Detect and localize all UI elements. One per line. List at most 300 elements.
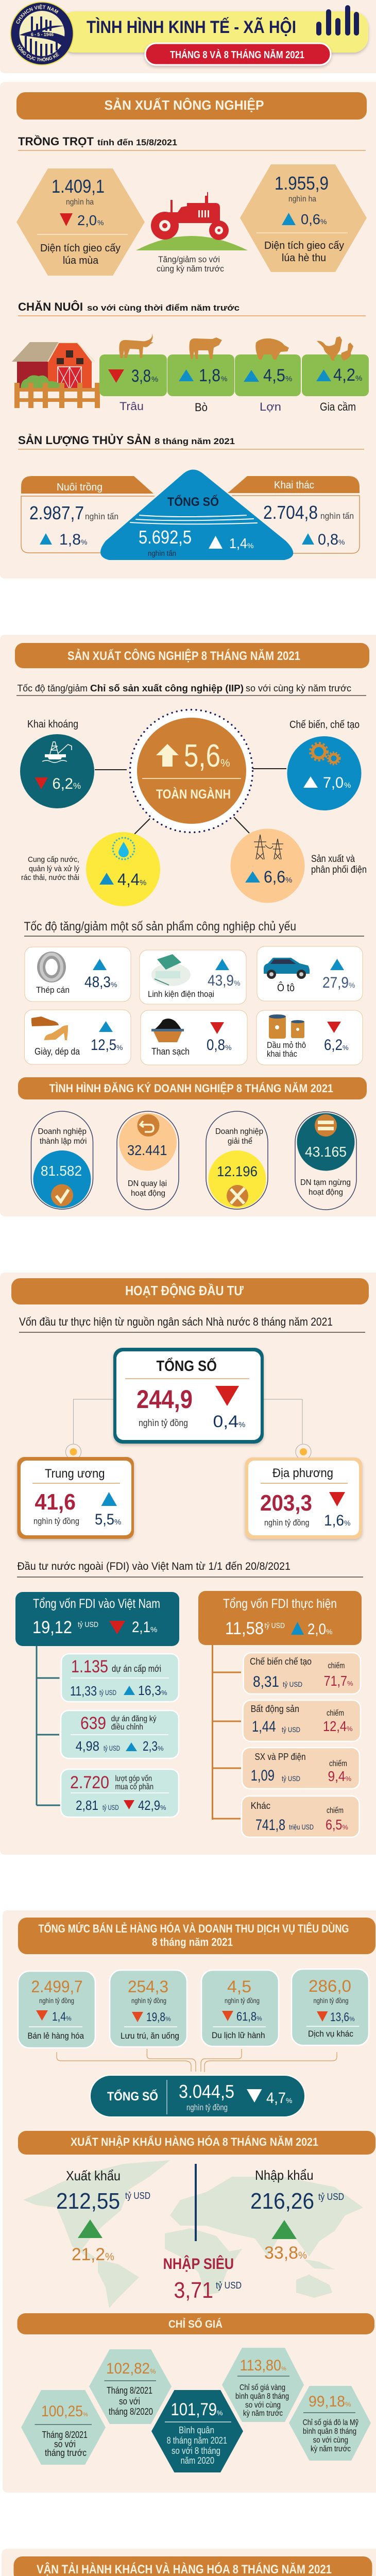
card: adjusted projects: 639 [80,1714,106,1733]
stat: cattle [179,366,227,414]
capsule: new enterprises: Doanh nghiệp [38,1127,87,1136]
card: other FDI: 6,5 [326,1817,342,1833]
box: total FDI: 2,1 [132,1619,150,1636]
panel: agriculture [0,82,376,579]
icon: power pylons [254,835,283,859]
card: retail goods: 1,4 [52,2010,66,2024]
card: crude oil: Dầu mỏ thô [267,1040,306,1050]
card: real estate FDI [243,1700,361,1741]
icon: bar chart [316,5,359,36]
hexagon: autumn rice: Diện tích gieo cấy [40,243,121,254]
box: central: 5,5 [95,1511,114,1528]
stat: poultry: % [355,374,362,383]
green stat boxes [99,354,369,396]
hexagon: US dollar price: 99,18 [309,2393,345,2410]
import [250,2167,344,2263]
hexagon: gold price: kỳ năm trước [243,2409,283,2418]
hexagon: US dollar price: kỳ năm trước [311,2445,351,2453]
icon: gears [310,743,340,765]
card: tourism: % [257,2015,262,2022]
capsule: new enterprises: thành lập mới [40,1137,87,1146]
card: other FDI [242,1796,360,1837]
stat: cattle: Bò [195,401,208,414]
panel: investment [0,1273,376,1855]
hexagon: summer-autumn rice [240,164,367,272]
total fishery triangle: 5.692,5 [139,527,192,548]
heading: livestock [18,300,366,316]
section heading: trade: XUẤT NHẬP KHẨU HÀNG HÓA 8 THÁNG NĂM 2021 [71,2136,318,2148]
card: capital contributions: 2.720 [70,1773,109,1792]
text: compare note: cùng kỳ năm trước [157,264,224,274]
card: crude oil [257,1010,363,1065]
circle: water supply [21,832,160,906]
box: total FDI: % [150,1625,157,1634]
card: real estate FDI: chiếm [327,1709,344,1718]
card: adjusted projects: % [158,1744,164,1752]
card: crude oil: % [343,1044,349,1052]
box: total FDI: Tổng vốn FDI vào Việt Nam [33,1597,160,1611]
hexagon: vs August 2020: Tháng 8/2021 [107,2385,152,2396]
stat: pigs [244,366,292,413]
stat: cattle: 1,8 [199,366,220,385]
card: other FDI: triệu USD [289,1823,314,1831]
card: retail goods: % [66,2015,72,2022]
card: real estate FDI: tỷ USD [282,1725,300,1734]
import: Nhập khẩu [255,2167,313,2183]
stat: buffalo: 3,8 [131,366,151,386]
heading: livestock: CHĂN NUÔI [18,300,83,313]
subtitle pill: THÁNG 8 VÀ 8 THÁNG NĂM 2021 [170,49,304,61]
export: tỷ USD [125,2191,150,2201]
total retail pill [90,2075,305,2117]
card: cars [257,946,363,1001]
hexagon: gold price: bình quân 8 tháng [235,2392,289,2401]
hexagon: eight-month average CPI: Bình quân [179,2425,214,2435]
capture box: nghìn tấn [320,511,354,521]
section heading: SẢN XUẤT CÔNG NGHIỆP 8 THÁNG NĂM 2021 [67,648,300,663]
total fishery triangle: nghìn tấn [148,549,176,558]
card: phone components [140,950,246,1004]
stat: poultry: Gia cầm [320,400,356,413]
hexagon: autumn rice: % [97,218,104,227]
total fishery triangle [100,470,293,560]
section heading: retail [18,1918,375,1954]
box: central: 41,6 [35,1489,76,1515]
heading: FDI: Đầu tư nước ngoài (FDI) vào Việt Nam từ 1/1 đến 20/8/2021 [18,1561,290,1572]
stat: poultry [316,365,362,413]
capsule: returned enterprises: 32.441 [127,1142,167,1158]
hexagon: US dollar price: bình quân 8 tháng [303,2427,356,2436]
card: new projects: 16,3 [138,1683,161,1698]
card: cars: % [349,981,355,989]
section heading: SẢN XUẤT NÔNG NGHIỆP [104,97,264,113]
card: capital contributions: lượt góp vốn [115,1774,152,1783]
import: 33,8 [264,2243,298,2263]
capture box: Khai thác [274,480,314,491]
box: central: Trung ương [45,1467,105,1481]
card: phone components: % [234,979,240,987]
total retail pill: nghìn tỷ đồng [186,2103,228,2112]
card: capital contributions: tỷ USD [102,1803,118,1811]
hexagon: US dollar price: so với cùng [313,2436,348,2445]
central circle: whole industry [130,710,252,833]
hexagon: summer-autumn rice: 0,6 [301,211,320,227]
box: local [245,1458,362,1539]
card: coal [141,1010,247,1065]
section heading: HOẠT ĐỘNG ĐẦU TƯ [125,1283,244,1298]
section heading: price index: CHỈ SỐ GIÁ [168,2318,223,2330]
section heading [11,1278,369,1304]
central circle: whole industry: 5,6 [184,738,220,774]
icon: buffalo [119,333,153,358]
circle: manufacturing: 7,0 [323,774,344,791]
panel: trade and prices [3,1910,376,2493]
title: TÌNH HÌNH KINH TẾ - XÃ HỘI [87,17,296,37]
hexagon: vs August 2020: so với [119,2396,140,2406]
circle: electricity [231,828,367,903]
card: electricity FDI: chiếm [329,1759,347,1768]
hexagon: summer-autumn rice: lúa hè thu [282,252,326,264]
box: local: nghìn tỷ đồng [264,1518,310,1528]
card: retail goods: Bán lẻ hàng hóa [28,2031,84,2041]
aquaculture box: % [81,538,87,546]
circle: electricity: Sản xuất và [311,854,355,865]
box: disbursed FDI: Tổng vốn FDI thực hiện [223,1597,337,1611]
capsule: dissolved enterprises [206,1111,268,1209]
circle: manufacturing: Chế biến, chế tạo [289,719,360,731]
card: manufacturing FDI: tỷ USD [283,1680,302,1688]
card: tourism: 4,5 [227,1977,251,1996]
box: total FDI: tỷ USD [78,1620,98,1629]
capsule: returned enterprises: DN quay lại [128,1179,167,1188]
hexagon: US dollar price [289,2386,371,2461]
box: total FDI [15,1592,179,1646]
box: total investment [113,1348,264,1444]
box: local: 1,6 [324,1512,344,1529]
box: total investment: 244,9 [136,1385,193,1414]
card: rolled steel [25,947,131,1002]
logo: General Statistics Office: TỔNG CỤC THỐNG KÊ [17,44,59,61]
circle: manufacturing: % [344,781,351,790]
total retail pill: 3.044,5 [179,2081,234,2102]
panel: transport and visitors [2,2549,376,2576]
circle: electricity: 6,6 [264,868,285,886]
card: capital contributions: mua cổ phần [115,1782,153,1791]
heading: IIP [16,683,366,696]
card: phone components: 43,9 [208,972,234,989]
card: new projects: dự án cấp mới [112,1664,161,1674]
card: tourism: 61,8 [236,2010,257,2024]
card: capital contributions: 42,9 [138,1798,160,1813]
total fishery triangle: TỔNG SỐ [167,495,219,509]
total retail pill: % [286,2096,292,2105]
card: accommodation: 254,3 [128,1977,168,1996]
hexagon: gold price: 113,80 [240,2357,281,2374]
card: electricity FDI: % [345,1775,351,1783]
import: % [298,2250,307,2261]
hexagon: autumn rice: 1.409,1 [52,176,105,197]
capsule: suspended enterprises [295,1112,356,1210]
box: disbursed FDI [198,1591,362,1645]
icon: poultry [317,336,353,361]
section heading [15,643,369,668]
card: coal: % [225,1043,231,1052]
card: crude oil: 6,2 [324,1037,343,1054]
heading: crops [18,135,366,150]
hexagon: autumn rice: nghìn ha [66,198,94,207]
hexagon: eight-month average CPI: 8 tháng năm 2021 [167,2435,227,2446]
card: real estate FDI: 1,44 [252,1718,276,1735]
circle: electricity: phân phối điện [311,865,367,875]
hexagon: vs August 2020: 102,82 [106,2360,150,2377]
circle: mining: Khai khoáng [27,719,78,730]
hexagon: vs previous month: Tháng 8/2021 [42,2430,88,2440]
export: 21,2 [72,2245,105,2264]
hexagon: summer-autumn rice: % [320,217,327,226]
world map background [23,2160,363,2308]
hexagon: vs August 2020: % [150,2367,156,2375]
circle: mining: 6,2 [53,775,73,792]
card: other services: 286,0 [309,1977,351,1995]
total retail pill: TỔNG SỐ [107,2089,158,2104]
card: other services: Dịch vụ khác [308,2029,353,2039]
box: central: nghìn tỷ đồng [33,1516,79,1526]
card: tourism [201,1970,279,2046]
capture box: 2.704,8 [263,502,318,523]
card: retail goods [18,1971,95,2048]
panel: header [0,0,376,73]
capsule: new enterprises [31,1111,93,1209]
icon: pig [255,338,289,360]
trade deficit: NHẬP SIÊU [163,2255,234,2273]
card: adjusted projects: điều chỉnh [111,1723,143,1732]
hexagon: gold price [222,2348,304,2422]
yellow title band [60,11,368,53]
text: compare note [157,255,224,274]
card: other FDI: Khác [251,1801,270,1811]
circle: water supply: quản lý và xử lý [29,865,79,873]
trade deficit: tỷ USD [216,2280,242,2291]
card: manufacturing FDI: % [347,1680,353,1687]
card: cars: 27,9 [322,974,349,991]
hexagon: eight-month average CPI [151,2390,243,2472]
card: adjusted projects [61,1710,179,1758]
card: rolled steel: % [111,980,117,989]
icon: tractor [136,192,248,250]
hexagon: vs previous month: so với [54,2439,76,2449]
hexagon: summer-autumn rice: 1.955,9 [275,173,329,194]
circle: water supply: % [140,878,146,887]
box: total FDI: 19,12 [32,1618,72,1637]
card: new projects: 11,33 [70,1683,97,1699]
node dots [66,1444,311,1460]
section heading: enterprises [18,1077,367,1099]
card: capital contributions: 2,81 [76,1798,98,1813]
stat: buffalo [108,366,158,413]
heading: IIP: so với cùng kỳ năm trước [246,683,351,693]
hexagon: US dollar price: % [345,2400,351,2408]
hexagon: eight-month average CPI: 101,79 [171,2400,217,2419]
card: new projects: tỷ USD [99,1688,116,1697]
capsule: dissolved enterprises: giải thể [228,1137,252,1146]
hexagon: vs August 2020: tháng 8/2020 [109,2406,153,2417]
card: coal: Than sạch [151,1046,190,1057]
heading: crops: TRỒNG TRỌT [18,135,94,148]
capture box: 0,8 [318,531,338,548]
card: footwear: Giày, dép da [35,1046,80,1057]
card: other FDI: % [342,1823,348,1831]
export: Xuất khẩu [66,2168,121,2183]
card: accommodation [110,1970,187,2047]
trade deficit [163,2255,242,2303]
heading: livestock: so với cùng thời điểm năm trước [87,303,240,313]
hexagon: vs previous month [21,2390,106,2465]
card: new projects: 1.135 [71,1657,108,1676]
capsule: suspended enterprises: DN tạm ngừng [300,1178,351,1187]
import: 216,26 [250,2189,314,2214]
card: footwear: % [116,1043,123,1052]
icon: barn [12,342,100,408]
heading: IIP: Tốc độ tăng/giảm [18,683,88,693]
total fishery triangle: % [247,541,253,550]
heading: IIP: Chỉ số sản xuất công nghiệp (IIP) [90,683,244,693]
connector arrows [57,2049,337,2072]
card: other FDI: 741,8 [255,1817,285,1834]
capsule: dissolved enterprises: 12.196 [217,1163,258,1179]
circle: electricity: % [285,876,292,885]
hexagon: eight-month average CPI: % [217,2409,223,2417]
card: manufacturing FDI: 8,31 [253,1673,279,1690]
box: disbursed FDI: 11,58 [225,1619,264,1638]
logo: General Statistics Office: 6 - 5 - 1946 [31,32,54,37]
stat: buffalo: % [151,375,158,384]
box: disbursed FDI: 2,0 [307,1621,326,1638]
card: capital contributions: % [160,1804,166,1811]
total retail pill: 4,7 [266,2090,286,2107]
card: rolled steel: 48,3 [84,974,111,991]
capsule: new enterprises: 81.582 [41,1163,82,1179]
section heading: retail: 8 tháng năm 2021 [152,1936,233,1948]
box: total investment: 0,4 [213,1412,238,1431]
card: accommodation: nghìn tỷ đồng [131,1996,166,2005]
circle: water supply: Cung cấp nước, [28,855,79,864]
hexagon: autumn rice: 2,0 [77,212,97,228]
hexagon: gold price: Chỉ số giá vàng [240,2383,285,2392]
export: 212,55 [56,2189,120,2214]
hexagon: eight-month average CPI: so với 8 tháng [172,2446,220,2456]
capsule: suspended enterprises: 43.165 [305,1144,347,1160]
box: total investment: nghìn tỷ đồng [139,1418,188,1428]
card: other FDI: chiếm [327,1806,344,1815]
card: footwear: 12,5 [91,1037,116,1054]
card: adjusted projects: 4,98 [76,1738,99,1754]
card: real estate FDI: 12,4 [323,1718,347,1734]
aquaculture box: nghìn tấn [85,512,118,521]
hexagon: summer-autumn rice: nghìn ha [288,195,316,204]
card: retail goods: 2.499,7 [31,1977,83,1996]
box: disbursed FDI: % [326,1628,332,1636]
hexagon: vs previous month: tháng trước [45,2448,87,2458]
card: electricity FDI: tỷ USD [282,1774,300,1783]
card: accommodation: 19,8 [146,2010,165,2024]
heading: fishery [18,434,364,449]
icon: oil rig [42,742,72,762]
hexagon: autumn rice: lúa mùa [63,255,99,266]
hexagon: vs previous month: 100,25 [41,2403,83,2420]
circle: manufacturing [287,719,362,810]
card: coal: 0,8 [207,1037,225,1054]
total fishery triangle: 1,4 [229,535,247,551]
heading: crops: tính đến 15/8/2021 [97,138,177,147]
box: central: % [114,1518,121,1527]
hexagon: vs previous month: % [83,2412,88,2418]
stat: poultry: 4,2 [333,365,355,385]
hexagon: gold price: so với cùng [245,2401,281,2410]
hexagon: US dollar price: Chỉ số giá đô la Mỹ [303,2418,358,2427]
card: adjusted projects: tỷ USD [104,1744,120,1752]
card: phone components: Linh kiện điện thoại [148,989,214,999]
card: tourism: nghìn tỷ đồng [225,1996,260,2005]
card: manufacturing FDI: Chế biến chế tạo [250,1656,312,1667]
card: footwear [25,1010,131,1064]
stat: pigs: Lợn [260,400,281,413]
stat: buffalo: Trâu [119,400,144,413]
box: total investment: TỔNG SỐ [157,1357,217,1375]
card: capital contributions [61,1769,179,1817]
stat: pigs: % [285,375,292,383]
hexagon: autumn rice [16,168,145,276]
subtitle pill [145,43,331,65]
export [56,2168,150,2264]
capsule: returned enterprises [117,1111,179,1210]
box: central [18,1457,134,1539]
box: total investment: % [238,1420,245,1429]
icon: cow [189,337,222,359]
central circle: whole industry: % [220,757,230,769]
card: rolled steel: Thép cán [36,985,70,995]
card: electricity FDI: 1,09 [251,1767,275,1784]
heading: fishery: 8 tháng năm 2021 [155,436,235,446]
card: new projects [61,1654,179,1702]
heading: state capital: Vốn đầu tư thực hiện từ nguồn ngân sách Nhà nước 8 tháng năm 2021 [19,1315,333,1328]
card: manufacturing FDI: 71,7 [324,1673,347,1689]
card: electricity FDI: 9,4 [328,1768,345,1784]
card: manufacturing FDI [244,1653,361,1694]
hexagon: summer-autumn rice: Diện tích gieo cấy [264,240,344,251]
hexagon: vs August 2020 [89,2349,172,2424]
box: local: % [344,1519,350,1527]
section heading: transport [13,2556,372,2576]
card: adjusted projects: dự án đăng ký [111,1715,157,1723]
stat: pigs: 4,5 [263,366,285,385]
card: new projects: % [161,1689,167,1697]
aquaculture box: Nuôi trồng [57,482,102,493]
capture box: % [338,538,345,546]
section heading: trade [18,2131,375,2155]
card: other services: 13,6 [330,2010,349,2024]
import: tỷ USD [318,2192,344,2202]
card: real estate FDI: Bất động sản [251,1704,299,1714]
circle: mining [20,719,94,808]
section heading: enterprises: TÌNH HÌNH ĐĂNG KÝ DOANH NGHIỆP 8 THÁNG NĂM 2021 [49,1082,333,1095]
panel: industry [0,635,376,1216]
heading: products: Tốc độ tăng/giảm một số sản phẩm công nghiệp chủ yếu [24,920,296,934]
aquaculture box: 1,8 [59,531,81,548]
section heading: price index [18,2313,374,2334]
card: crude oil: khai thác [267,1049,297,1059]
box: local: Địa phương [272,1466,333,1480]
card: tourism: Du lịch lữ hành [212,2030,265,2040]
